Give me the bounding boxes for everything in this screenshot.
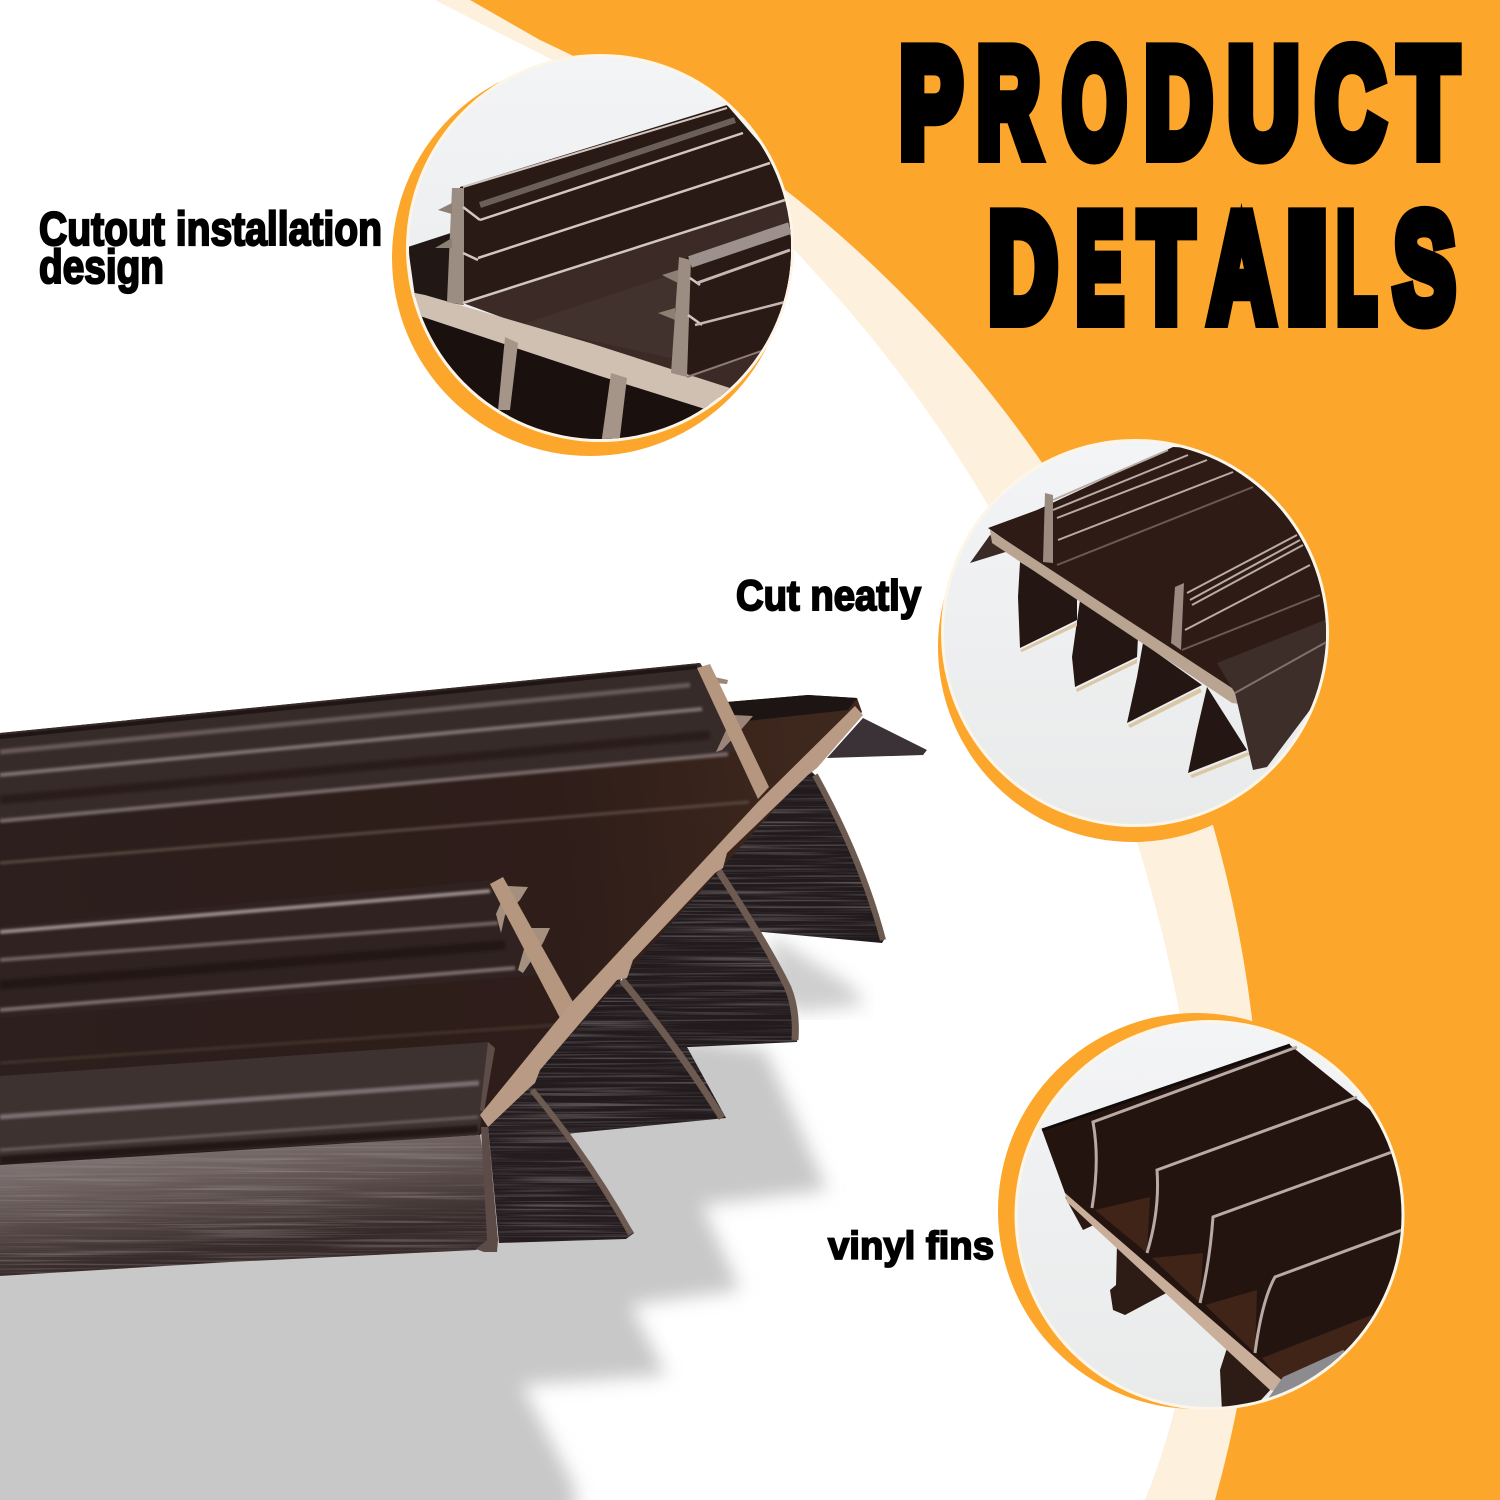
title: product details	[900, 18, 1458, 353]
top post	[697, 664, 769, 799]
title: product details: D	[989, 183, 1057, 353]
fin 3	[525, 980, 726, 1136]
strip body floor	[0, 663, 862, 1170]
fin 1	[712, 765, 885, 943]
main diagonal web	[480, 706, 863, 1127]
lower face panel	[0, 1135, 498, 1276]
callout: cutout installation design	[39, 50, 800, 456]
title: product details: E	[1076, 183, 1124, 353]
detail photo 2	[940, 438, 1340, 830]
orange crescent	[938, 452, 1328, 842]
orange crescent	[998, 1013, 1394, 1409]
lower end bar	[476, 1127, 498, 1252]
title: product details: A	[1209, 183, 1274, 353]
label: Cutout installation	[39, 202, 382, 255]
label: design	[39, 240, 164, 293]
title: product details: O	[1063, 18, 1126, 188]
fin 2	[615, 860, 798, 1047]
main product: weather strip with shadow	[0, 663, 927, 1500]
white ring	[1014, 1020, 1404, 1410]
title: product details: T	[1399, 18, 1458, 188]
white ring	[406, 54, 794, 442]
label: Cut neatly	[736, 572, 921, 620]
title: product details: S	[1394, 183, 1455, 353]
lower rail	[0, 1042, 495, 1163]
top post tabs	[710, 676, 753, 752]
callout: vinyl fins	[828, 1013, 1420, 1412]
label: vinyl fins	[828, 1225, 994, 1268]
cast shadow	[0, 935, 865, 1500]
fin 4	[488, 1088, 634, 1243]
title: product details: U	[1228, 18, 1299, 188]
title: product details: D	[1145, 18, 1212, 188]
callout: cut neatly	[736, 438, 1340, 842]
white ring	[941, 439, 1329, 827]
title: product details: I	[1286, 183, 1328, 353]
right flange wing	[827, 718, 927, 758]
back flange	[727, 695, 857, 722]
title: product details: C	[1316, 18, 1385, 188]
top rail	[0, 663, 749, 863]
title: product details: P	[900, 18, 962, 188]
title: product details: R	[977, 18, 1040, 188]
detail photo 1	[405, 50, 800, 450]
title: product details: T	[1139, 183, 1193, 353]
middle post	[490, 877, 573, 1018]
middle post tabs	[496, 886, 550, 973]
middle rail	[0, 880, 557, 1063]
title: product details: L	[1337, 183, 1377, 353]
detail photo 3	[1014, 1020, 1420, 1412]
orange crescent	[392, 60, 788, 456]
label	[39, 202, 382, 293]
